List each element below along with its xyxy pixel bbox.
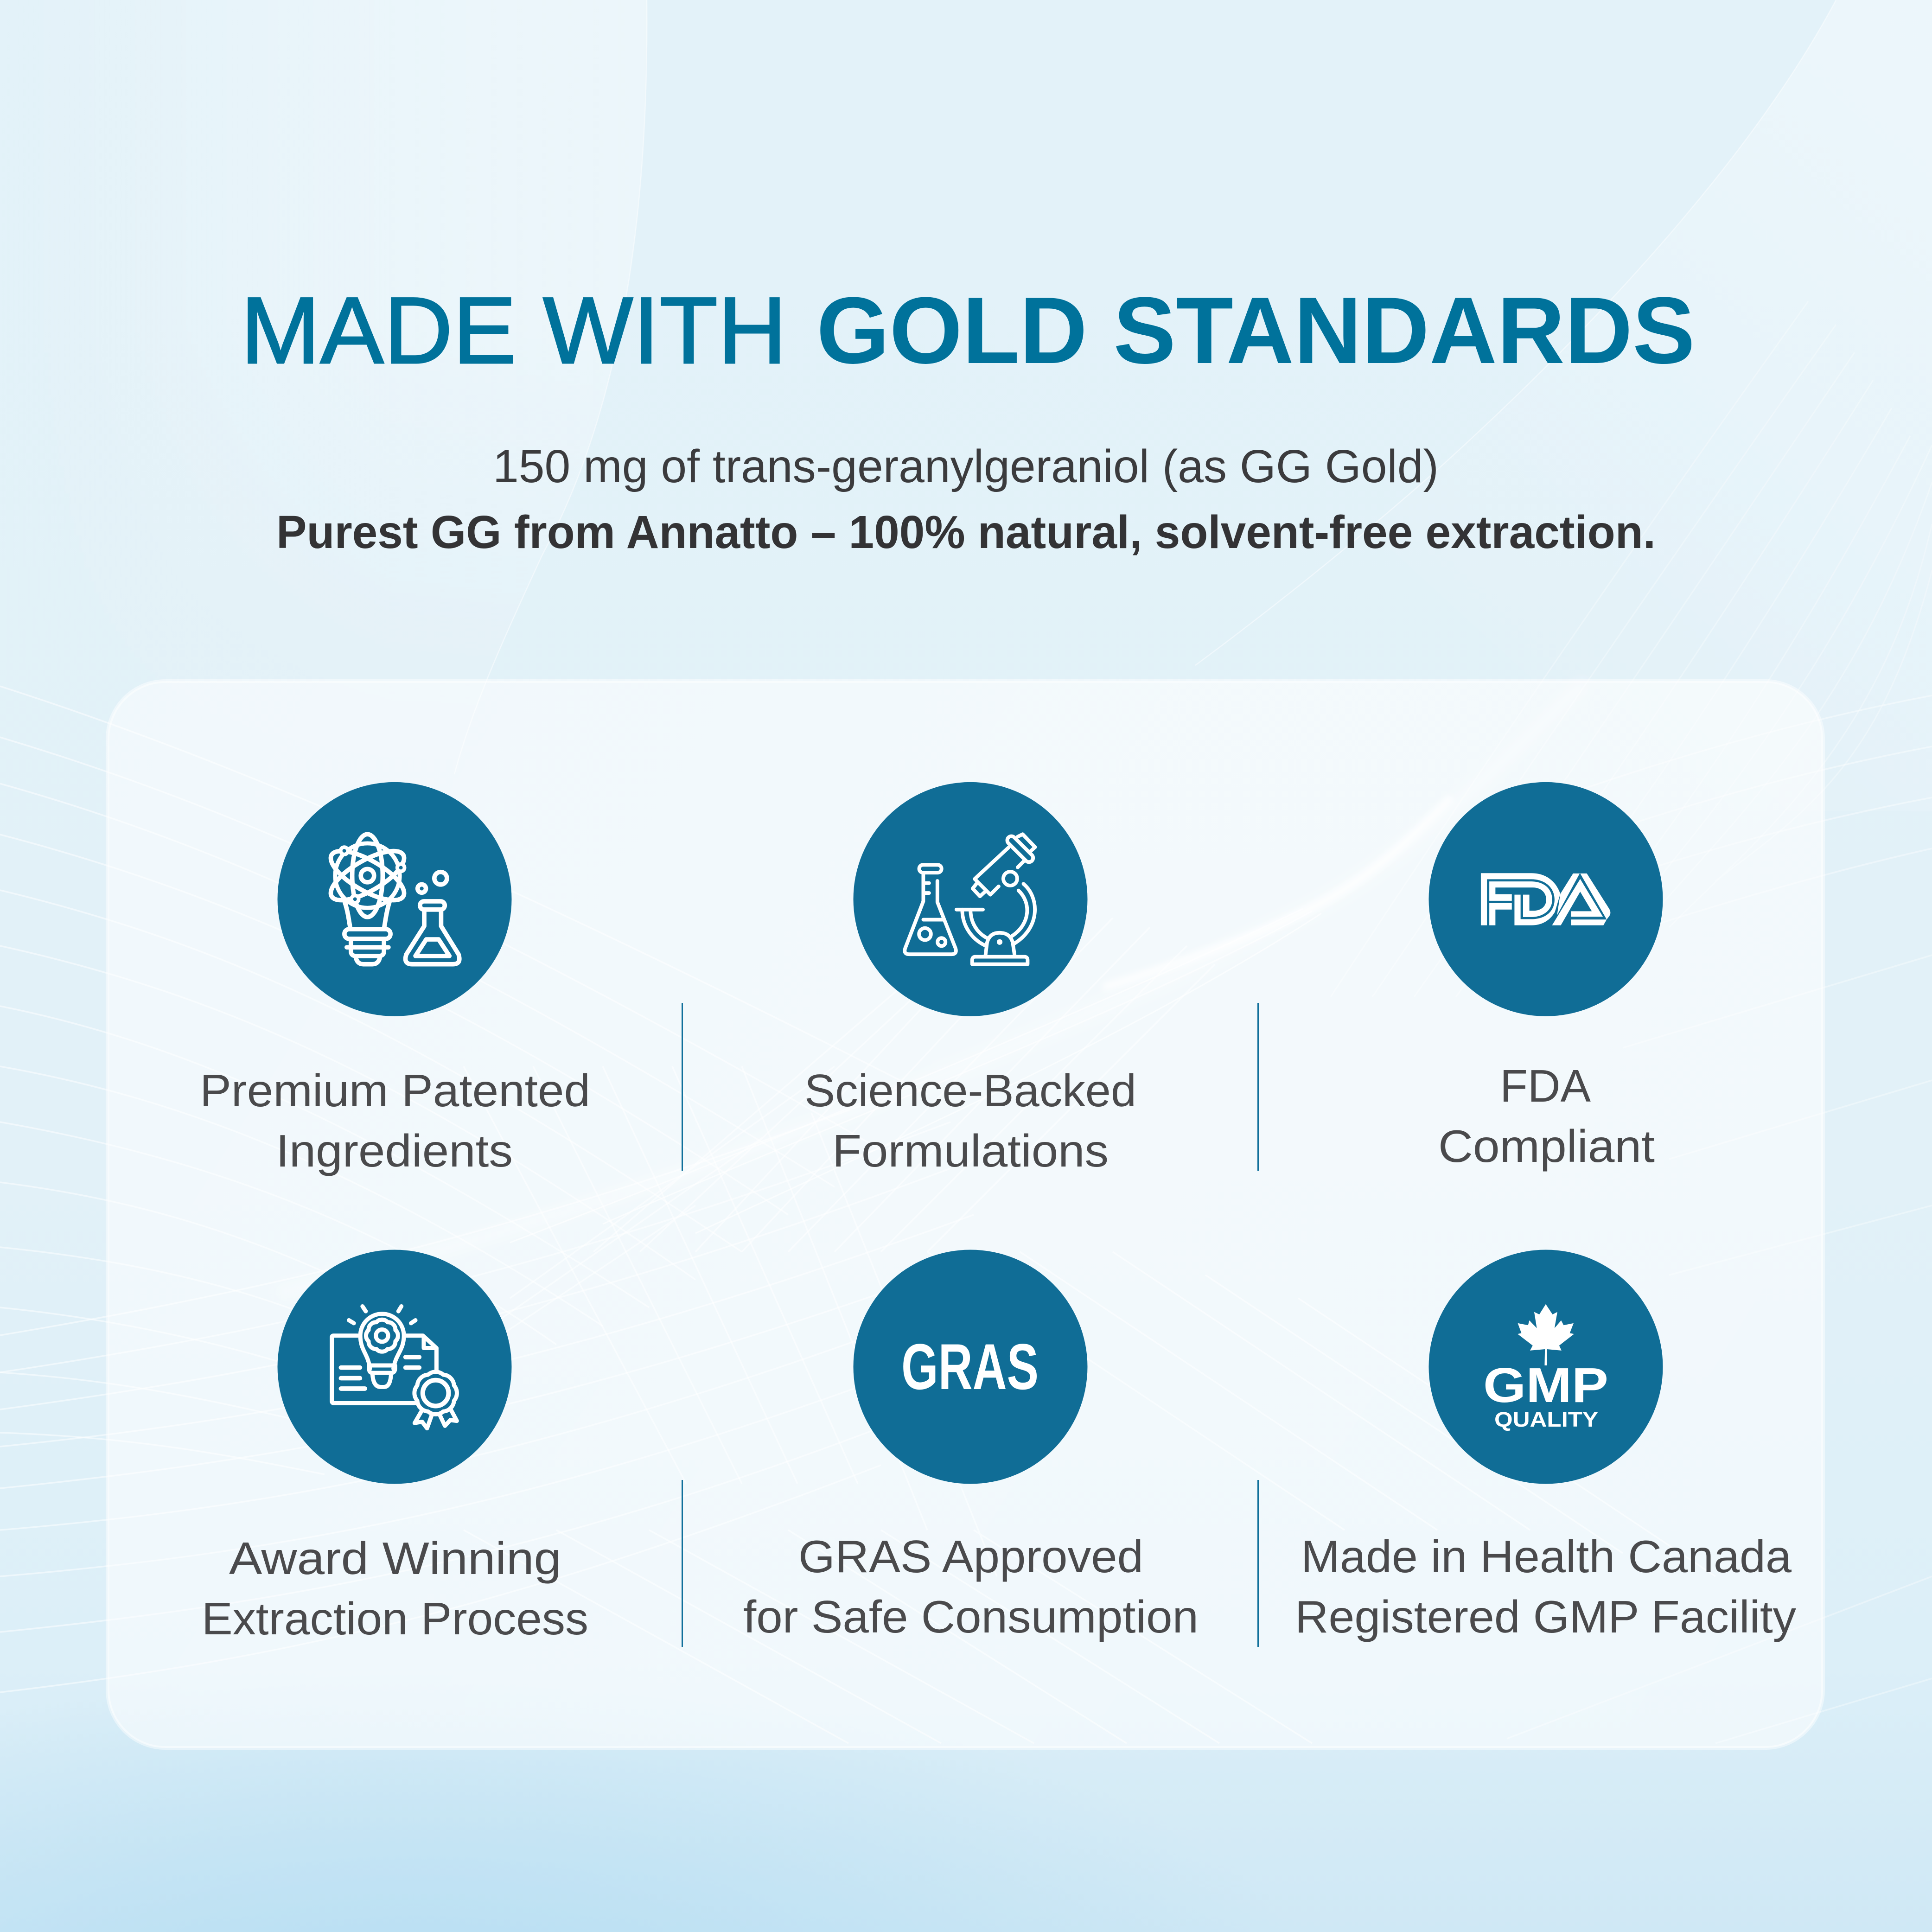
glow streak across panel [510,797,1451,1243]
label: gras approved: for Safe Consumption [743,1591,1199,1642]
icon: gras badge [853,1250,1088,1484]
icon: atom bulb and flask [277,782,512,1016]
divider: row 2 left [682,1480,683,1647]
label: award winning extraction process: Award Winning [229,1533,561,1584]
title: made with gold standards: MADE WITH [241,278,787,383]
icon: certificate with bulb and seal [277,1250,512,1484]
label: premium patented ingredients: Premium Patented [200,1065,590,1116]
label: science-backed formulations [804,1065,1136,1176]
label: fda compliant [1438,1060,1655,1172]
label: gras approved [743,1531,1199,1642]
label: made in health canada [1295,1531,1796,1642]
panel: certifications [108,681,1823,1748]
label: science-backed formulations: Science-Backed [804,1065,1136,1116]
label: science-backed formulations: Formulations [832,1125,1109,1176]
divider: row 2 right [1257,1480,1259,1647]
subtitle: dosage line: 150 mg of trans-geranylgeraniol (as GG Gold) [493,440,1439,492]
label: premium patented ingredients [200,1065,590,1176]
icon: fda logo [1429,782,1663,1016]
label: gras approved: GRAS Approved [798,1531,1143,1582]
label: made in health canada: Made in Health Canada [1301,1531,1792,1582]
label: award winning extraction process [202,1533,588,1644]
label: fda compliant: Compliant [1438,1121,1655,1172]
subtitle: purity line: Purest GG from Annatto – 100% natural, solvent-free extraction. [276,506,1656,558]
title: made with gold standards [241,278,1695,383]
icon: gmp quality maple leaf [1429,1250,1663,1484]
divider: row 1 right [1257,1003,1259,1171]
label: award winning extraction process: Extraction Process [202,1593,588,1644]
label: made in health canada: Registered GMP Facility [1295,1591,1796,1642]
icon: gmp quality maple leaf: QUALITY [1494,1408,1598,1431]
icon: gras badge: GRAS [901,1330,1039,1403]
title: made with gold standards: GOLD STANDARDS [816,278,1695,383]
label: premium patented ingredients: Ingredients [276,1125,513,1176]
label: fda compliant: FDA [1500,1060,1591,1111]
divider: row 1 left [682,1003,683,1171]
icon: flask and microscope [853,782,1088,1016]
icon: gmp quality maple leaf: GMP [1483,1358,1608,1413]
